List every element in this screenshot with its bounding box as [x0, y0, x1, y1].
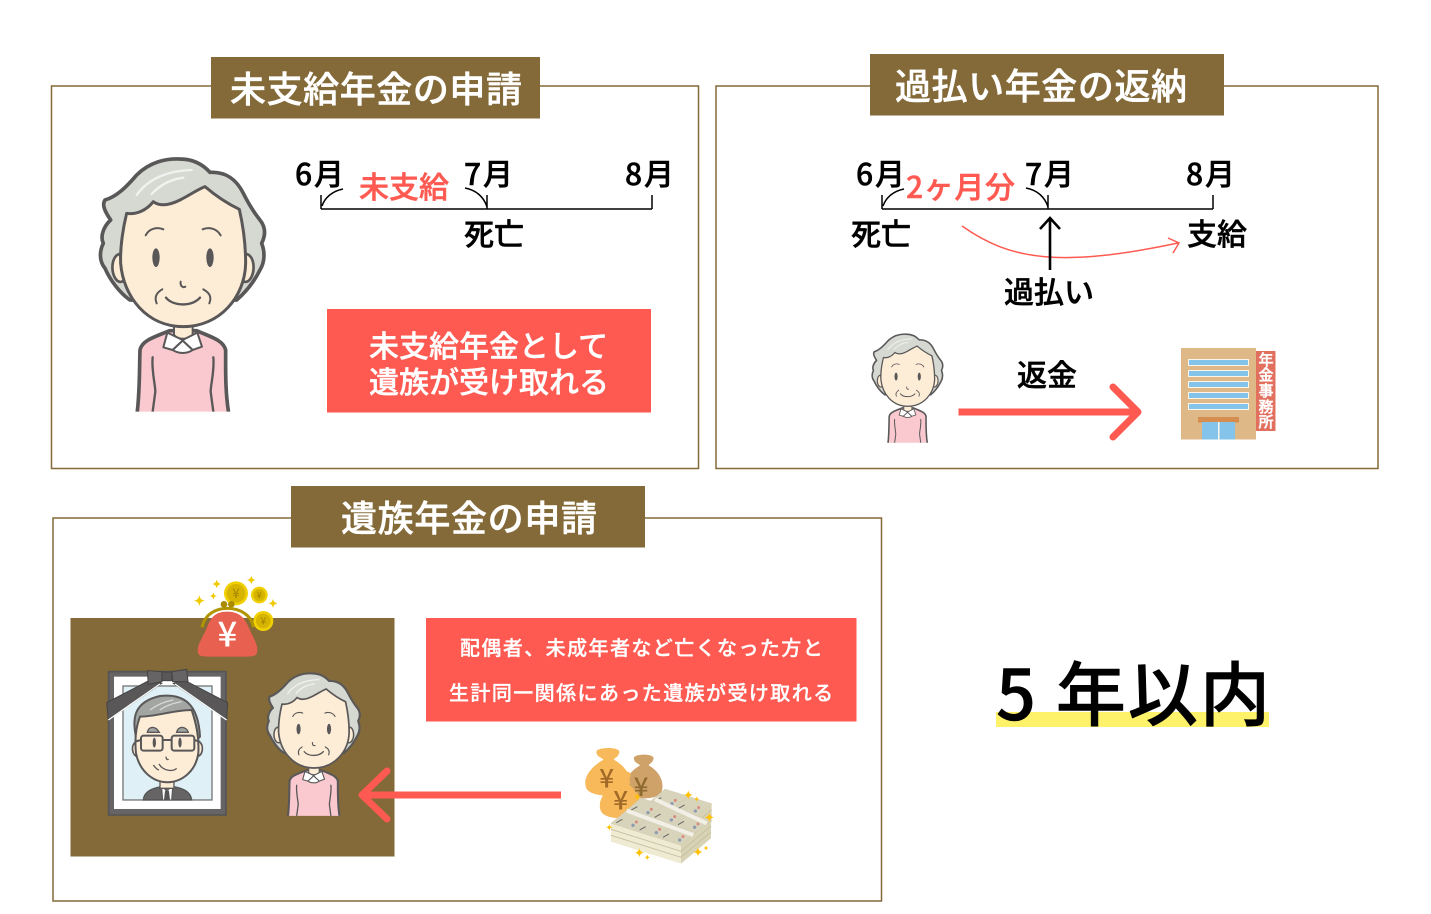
timeline: overpaid months: 8月 [1186, 150, 1235, 194]
timeline: unpaid months: 死亡 [464, 210, 524, 254]
label: refund: 返金 [1017, 351, 1077, 395]
icon: pension office building: 事 [1258, 380, 1274, 401]
panel: survivor pension claim [53, 486, 882, 901]
background block: family [70, 618, 394, 856]
timeline: overpaid months: 7月 [1025, 150, 1074, 194]
icon: money bags and banknotes: ¥ [599, 759, 614, 796]
heading: refund: 過払い年金の返納 [895, 58, 1187, 110]
timeline: unpaid months: 6月 [295, 150, 344, 194]
icon: coin purse with coins: ¥ [217, 607, 237, 657]
icon: pension office building: 金 [1258, 364, 1274, 385]
timeline: overpaid months: 過払い [1004, 268, 1094, 312]
callout: eligible survivors: 配偶者、未成年者など亡くなった方と [460, 632, 824, 661]
timeline: overpaid months [851, 150, 1247, 312]
illustration: elderly woman in family block [267, 673, 360, 819]
arrow: refund to office [958, 387, 1138, 437]
callout: eligible survivors: 生計同一関係にあった遺族が受け取れる [449, 677, 835, 706]
icon: pension office building [1181, 348, 1276, 440]
timeline: overpaid months: 死亡 [851, 210, 911, 254]
illustration: elderly woman [100, 159, 265, 417]
timeline: overpaid months: 支給 [1187, 210, 1247, 254]
timeline: overpaid months: 2ヶ月分 [906, 163, 1015, 207]
panel: overpaid pension refund [716, 54, 1378, 468]
icon: pension office building: 所 [1258, 411, 1274, 432]
icon: coin purse with coins: ¥ [232, 583, 240, 602]
icon: money bags and banknotes [585, 748, 714, 864]
timeline: unpaid months [295, 150, 674, 254]
icon: coin purse with coins: ¥ [260, 613, 266, 628]
icon: coin purse with coins [194, 575, 278, 657]
callout: bereaved family receives: 未支給年金として [369, 322, 608, 366]
heading: refund [870, 54, 1224, 116]
timeline: overpaid months: 6月 [856, 150, 905, 194]
callout: bereaved family receives [327, 309, 651, 412]
timeline: unpaid months: 7月 [464, 150, 513, 194]
icon: money bags and banknotes: ¥ [634, 767, 649, 804]
icon: pension office building: 務 [1258, 396, 1274, 417]
heading: survivor pension: 遺族年金の申請 [341, 490, 597, 542]
callout: eligible survivors [426, 618, 856, 722]
heading: survivor pension [291, 486, 645, 548]
icon: coin purse with coins: ¥ [257, 587, 263, 601]
arrow: money to family [362, 771, 561, 819]
icon: money bags and banknotes: ¥ [613, 780, 628, 817]
timeline: unpaid months: 8月 [625, 150, 674, 194]
timeline: unpaid months: 未支給 [359, 163, 449, 207]
panel: unpaid pension claim [52, 57, 698, 468]
illustration: funeral portrait [107, 669, 228, 815]
heading: unpaid pension: 未支給年金の申請 [230, 61, 522, 113]
callout: bereaved family receives: 遺族が受け取れる [369, 358, 609, 402]
icon: pension office building: 年 [1258, 349, 1274, 370]
illustration: elderly woman small [872, 334, 943, 445]
key figure: within five years: 5 年以内 [996, 640, 1270, 741]
